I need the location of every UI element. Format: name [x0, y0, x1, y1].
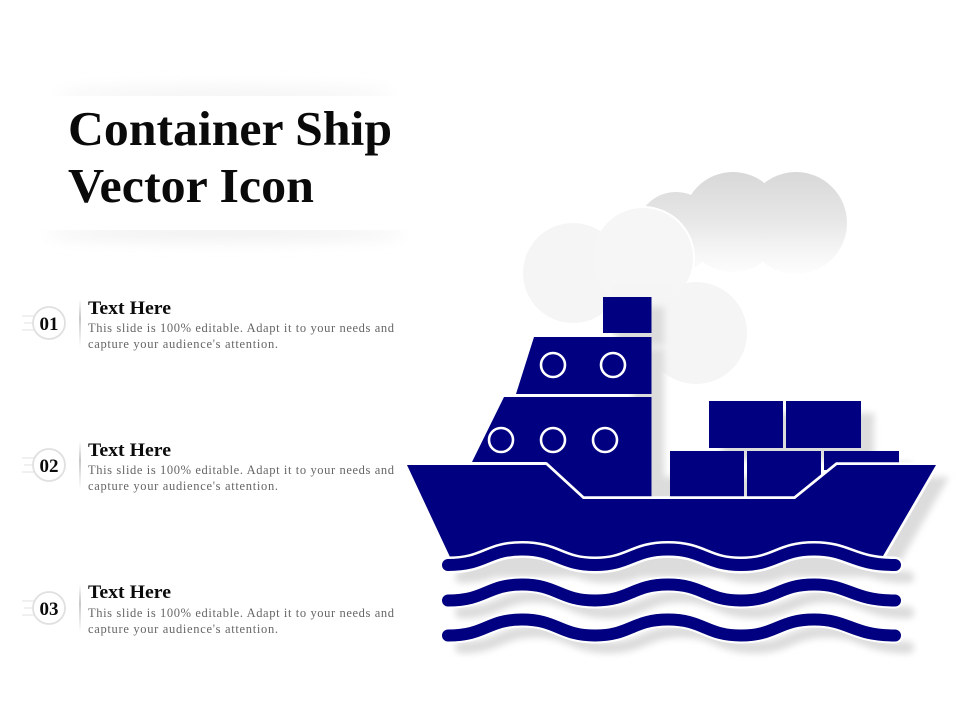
funnel — [603, 297, 652, 333]
lower deck with portholes — [472, 397, 652, 497]
wave 1 — [448, 550, 895, 565]
list item 02: This slide is 100% editable. Adapt it to your needs and — [88, 463, 395, 477]
list item 01: 01 — [40, 314, 58, 335]
list item 01 — [22, 298, 395, 351]
front smoke cloud — [523, 206, 747, 384]
list item 02: capture your audience's attention. — [88, 479, 278, 493]
hull — [407, 465, 936, 565]
wave 3 — [448, 620, 895, 636]
upper deck with portholes — [516, 337, 652, 394]
list item 02 — [22, 440, 395, 493]
title block: Vector Icon — [68, 158, 314, 213]
title block — [20, 89, 430, 239]
list item 02: 02 — [40, 456, 58, 477]
list item 03: Text Here — [88, 582, 171, 603]
list item 01: capture your audience's attention. — [88, 337, 278, 351]
list item 02: Text Here — [88, 440, 171, 461]
list item 03: This slide is 100% editable. Adapt it to your needs and — [88, 606, 395, 620]
containers — [670, 401, 899, 497]
list item 03 — [22, 582, 395, 636]
ship and wave shadow — [420, 307, 949, 648]
ship icon — [407, 297, 936, 636]
title block: Container Ship — [68, 101, 392, 156]
back smoke cloud — [636, 172, 847, 274]
list item 01: Text Here — [88, 298, 171, 319]
wave 2 — [448, 584, 895, 600]
list item 01: This slide is 100% editable. Adapt it to your needs and — [88, 321, 395, 335]
list item 03: 03 — [40, 599, 58, 620]
list item 03: capture your audience's attention. — [88, 622, 278, 636]
